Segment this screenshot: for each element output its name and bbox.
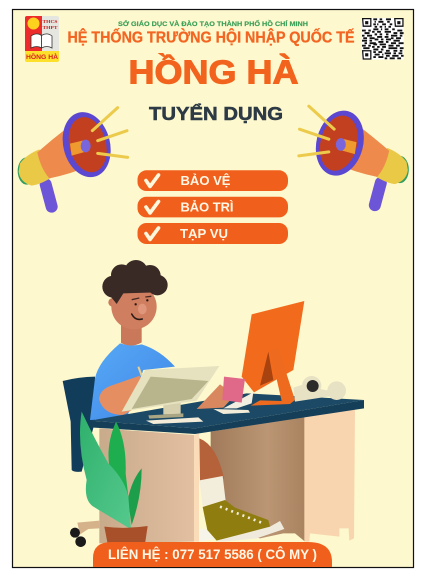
job: janitorial bbox=[138, 223, 288, 244]
QR code bbox=[362, 18, 404, 60]
illustration: person at desk bbox=[63, 260, 364, 547]
hair bbox=[102, 260, 168, 304]
small monitor bbox=[122, 366, 219, 419]
headphones bbox=[293, 376, 346, 402]
desk left panel bbox=[99, 428, 199, 543]
job: guard bbox=[138, 170, 288, 191]
system name: HỆ THỐNG TRƯỜNG HỘI NHẬP QUỐC TẾ bbox=[68, 26, 355, 46]
pink mug bbox=[222, 377, 245, 403]
arm bbox=[99, 376, 147, 415]
main title: HỒNG HÀ bbox=[128, 54, 298, 90]
job: janitorial: TẠP VỤ bbox=[180, 226, 228, 241]
job: guard: BẢO VỆ bbox=[180, 173, 231, 188]
icon: megaphone right bbox=[299, 106, 409, 205]
office chair bbox=[63, 377, 99, 547]
torso bbox=[90, 343, 175, 420]
contact bar: LIÊN HỆ : 077 517 5586 ( CÔ MY ) bbox=[108, 545, 317, 562]
potted plant bbox=[80, 412, 148, 544]
desk back panel bbox=[211, 417, 305, 542]
neck bbox=[121, 323, 142, 346]
keyboard and papers bbox=[146, 392, 253, 424]
job: maintenance bbox=[138, 197, 288, 217]
icon: megaphone left bbox=[18, 107, 128, 207]
icon: open book bbox=[31, 34, 52, 48]
department line: SỞ GIÁO DỤC VÀ ĐÀO TẠO THÀNH PHỐ HỒ CHÍ MINH bbox=[118, 18, 308, 28]
contact bar bbox=[93, 542, 332, 567]
head bbox=[102, 260, 168, 329]
job list bbox=[138, 170, 288, 244]
recruitment heading: TUYỂN DỤNG bbox=[149, 103, 283, 124]
job: maintenance: BẢO TRÌ bbox=[180, 200, 234, 214]
school logo: HỒNG HÀ bbox=[26, 51, 58, 61]
desk top bbox=[90, 393, 364, 434]
school logo: THCS bbox=[42, 19, 58, 24]
orange monitor bbox=[242, 301, 304, 406]
other forearm bbox=[197, 384, 235, 409]
desk right panel bbox=[304, 408, 355, 542]
school logo bbox=[25, 16, 59, 62]
leg under desk bbox=[198, 438, 284, 542]
school logo: THPT bbox=[42, 25, 58, 30]
